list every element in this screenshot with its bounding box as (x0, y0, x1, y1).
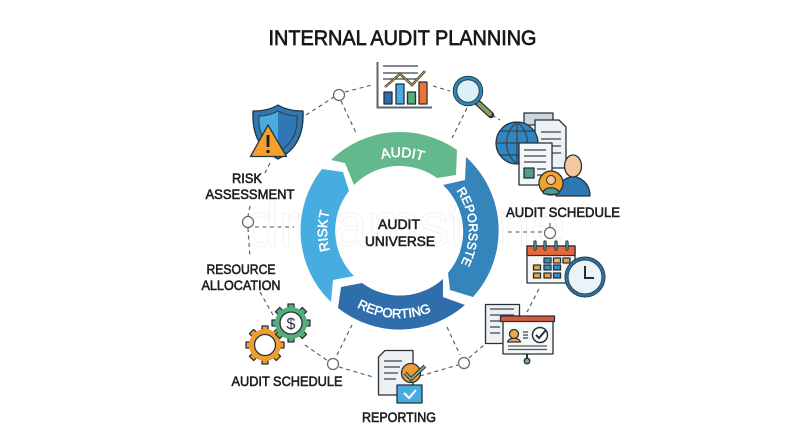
label: resource allocation: ALLOCATION (202, 277, 280, 293)
segment: reporting (338, 279, 465, 330)
label: audit schedule right: AUDIT SCHEDULE (506, 204, 620, 220)
title: INTERNAL AUDIT PLANNING (268, 27, 536, 50)
label: risk assessment (206, 170, 295, 202)
icon: magnifier (455, 78, 491, 115)
watermark: dreamstime (245, 191, 565, 260)
icon: presentation board (486, 304, 554, 364)
cycle ring (300, 132, 499, 330)
icon: calendar and clock (527, 242, 604, 296)
icon: gears with dollar: $ (287, 316, 296, 333)
icon: globe, documents and person (496, 113, 590, 196)
label: audit schedule left: AUDIT SCHEDULE (232, 373, 342, 389)
icon: report with check (378, 350, 425, 403)
label: reporting: REPORTING (362, 409, 436, 425)
segment: reporting: REPORTING (357, 299, 430, 318)
center label: AUDIT (378, 216, 420, 232)
label: resource allocation: RESOURCE (206, 261, 276, 277)
icon: shield with warning (250, 105, 303, 159)
segment: riskt: RISKT (317, 209, 330, 252)
segment: reporsste (443, 157, 499, 297)
segment: audit (331, 132, 457, 185)
icon: bar chart (378, 62, 432, 108)
segment: riskt (300, 169, 354, 302)
center label: UNIVERSE (365, 233, 435, 249)
dashed connector network (242, 85, 556, 377)
label: risk assessment: RISK (232, 170, 263, 186)
segment: reporsste: REPORSSTE (456, 186, 478, 267)
center label (365, 216, 435, 249)
label: risk assessment: ASSESSMENT (206, 186, 295, 202)
icon: gears with dollar (246, 304, 310, 364)
segment: audit: AUDIT (381, 147, 426, 160)
label: resource allocation (202, 261, 280, 293)
